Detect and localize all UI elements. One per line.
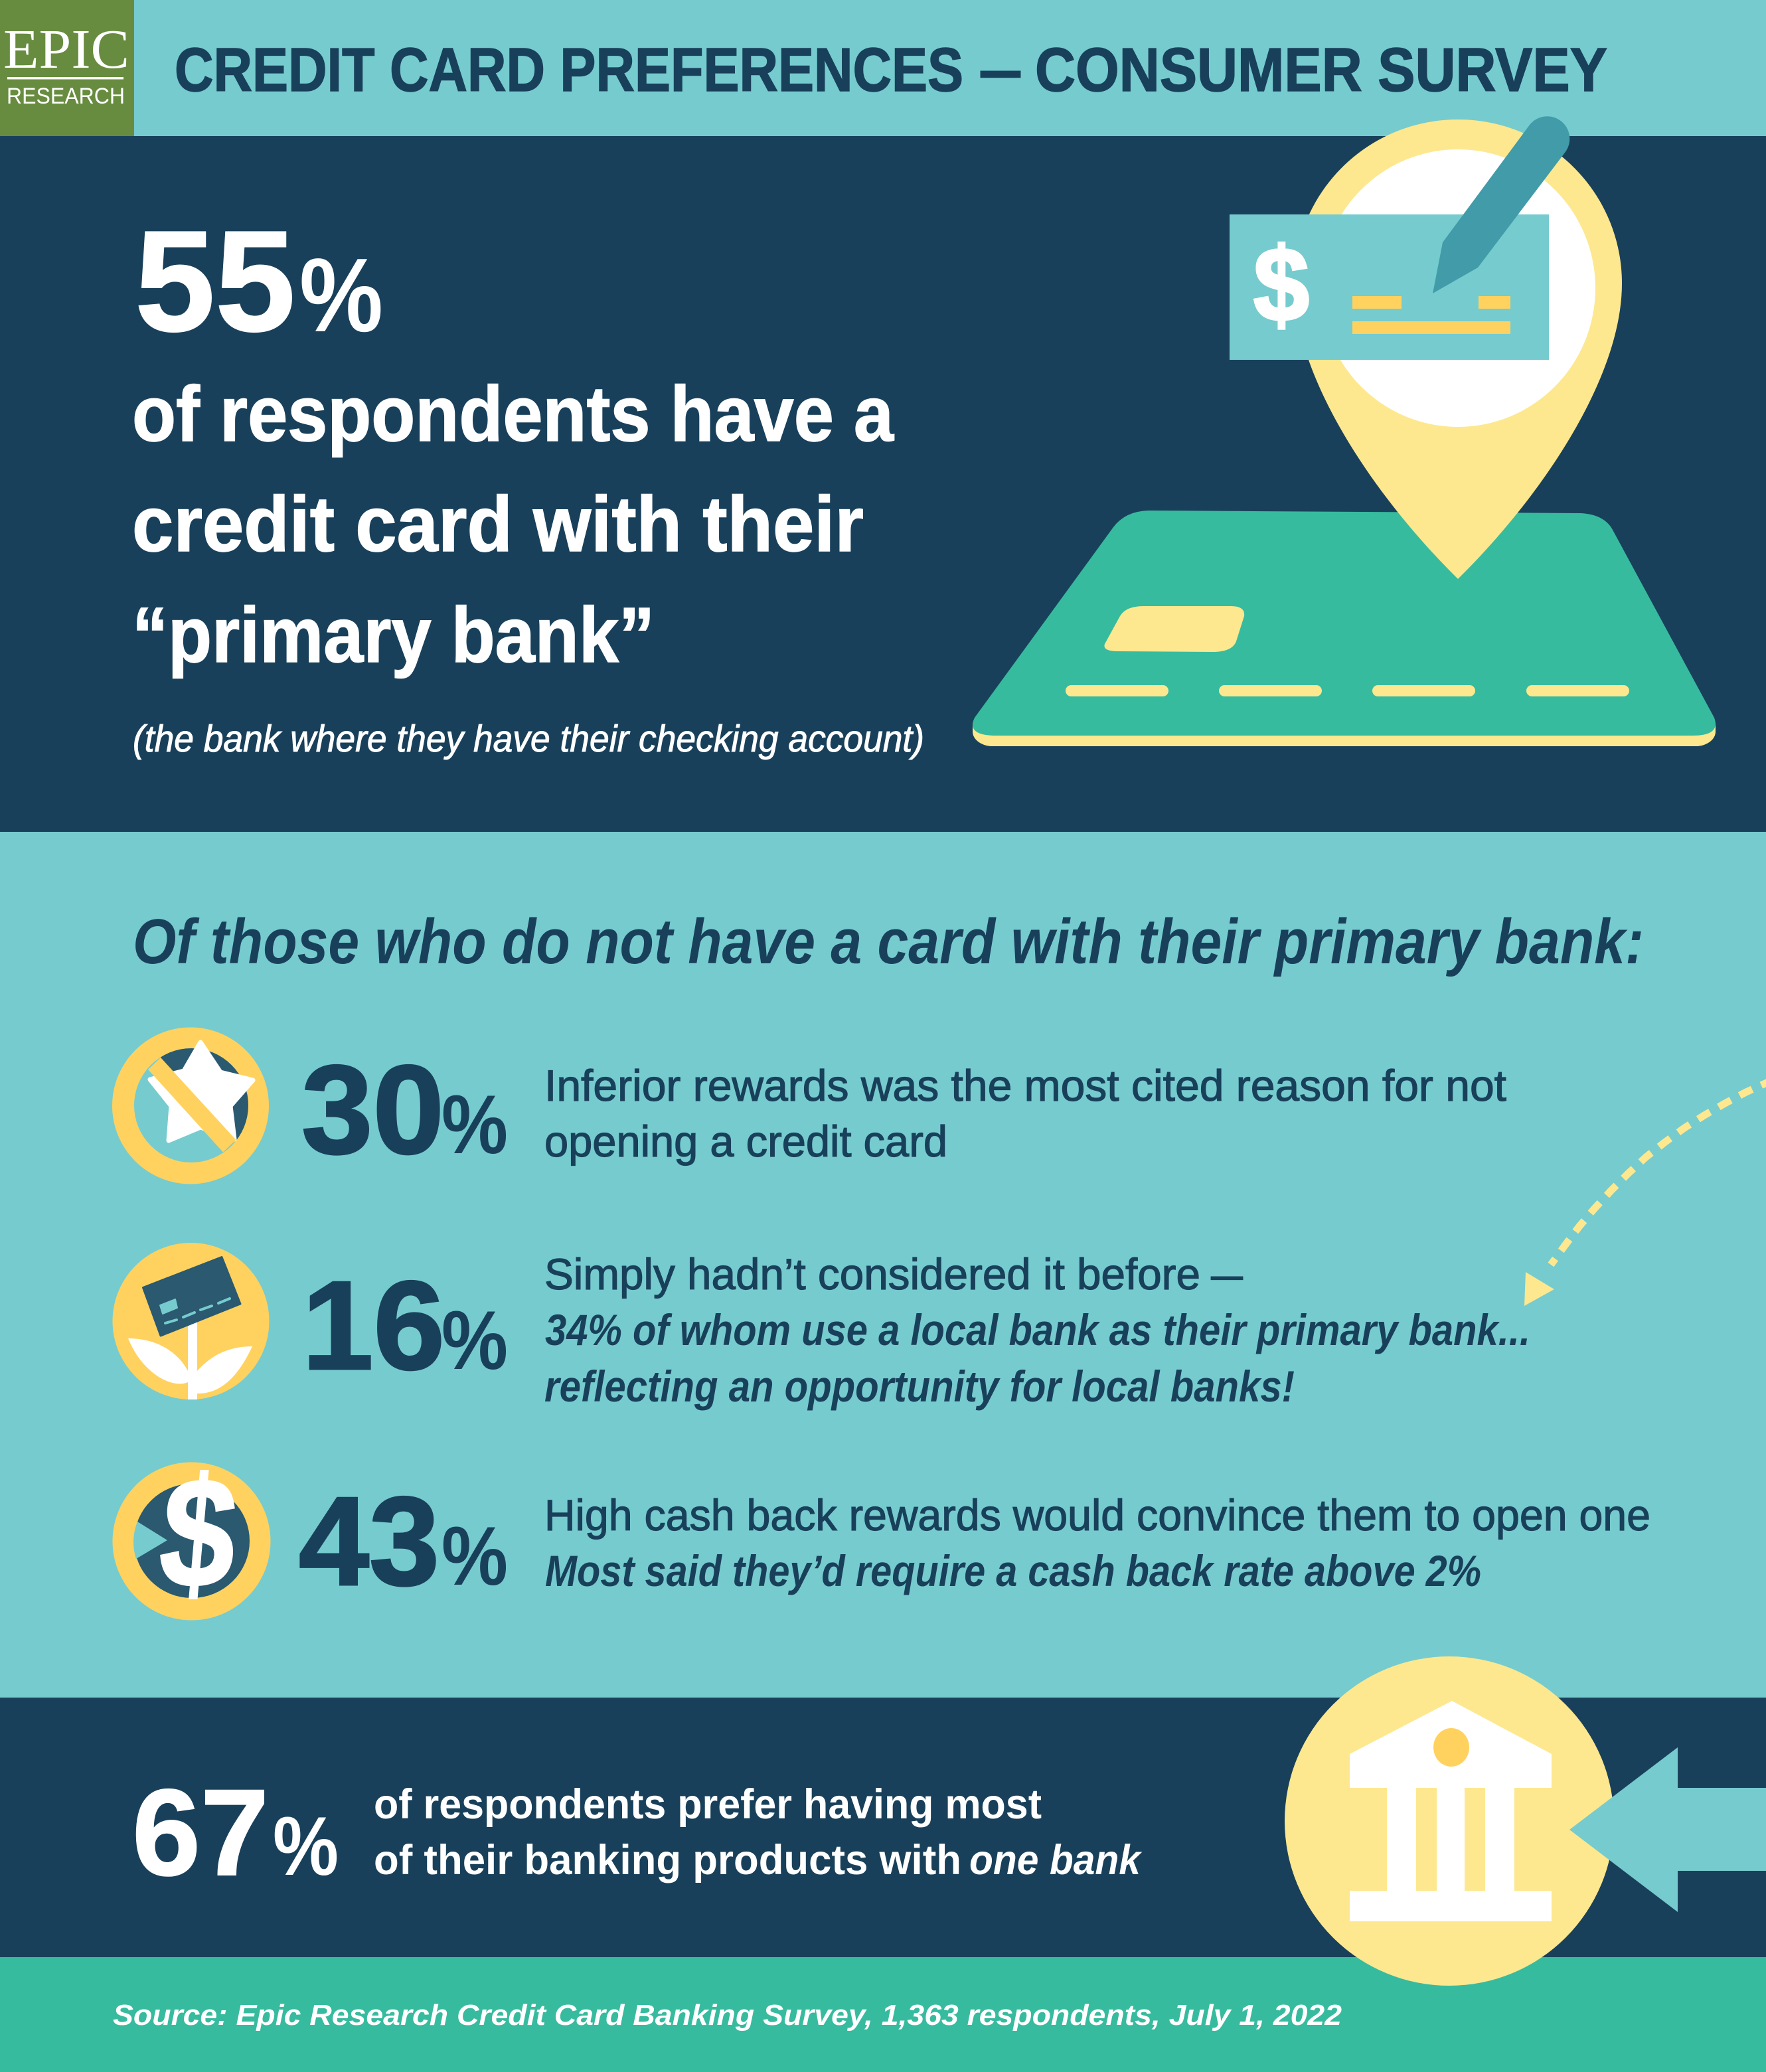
logo: Epic Research: EPIC — [3, 19, 129, 80]
stat: 16%: % — [442, 1295, 508, 1387]
hero text block: credit card with their — [132, 481, 864, 568]
card number dashes — [1066, 685, 1629, 696]
reason text: inferior rewards: opening a credit card — [544, 1117, 947, 1166]
text: prefer one bank: of their banking products with — [374, 1837, 961, 1883]
stat: 30% — [301, 1040, 508, 1180]
card chip — [1104, 606, 1244, 652]
title: CONSUMER SURVEY — [1035, 35, 1607, 104]
reason text: hadn't considered: reflecting an opportunity for local banks! — [544, 1362, 1295, 1411]
stat: 43%: % — [442, 1510, 508, 1603]
panel: hero dark band — [0, 136, 1766, 832]
reason text: cash back: Most said they’d require a cash back rate above 2% — [545, 1546, 1481, 1595]
hero text block: 55 — [135, 200, 295, 361]
pen — [1433, 116, 1569, 293]
reason text: inferior rewards: Inferior rewards was the most cited reason for not — [544, 1061, 1506, 1110]
reason text: cash back: High cash back rewards would convince them to open one — [544, 1490, 1650, 1540]
reason text: inferior rewards — [544, 1061, 1506, 1166]
stat: 16%: 16 — [302, 1255, 445, 1396]
hero text block: of respondents have a — [132, 370, 894, 458]
stat: 30%: 30 — [301, 1040, 444, 1180]
arrow: dashed curve pointing to local banks — [1524, 1079, 1766, 1306]
title: CREDIT CARD PREFERENCES — [175, 35, 963, 104]
hero text block — [132, 200, 924, 760]
text: prefer one bank: one bank — [969, 1837, 1143, 1883]
stat: 43%: 43 — [299, 1471, 440, 1612]
icon: bank building — [1285, 1656, 1614, 1986]
card edge — [973, 710, 1716, 746]
source line: Source: Epic Research Credit Card Banking Survey, 1,363 respondents, July 1, 2022 — [113, 1999, 1342, 2032]
location pin — [1294, 120, 1622, 579]
icon: dollar coin — [113, 1445, 271, 1620]
icon: star crossed out — [112, 1028, 269, 1184]
cheque dollar sign: $ — [1253, 226, 1309, 343]
logo: Epic Research: RESEARCH — [7, 84, 125, 109]
hero text block: “primary bank” — [132, 592, 655, 679]
cheque lines — [1352, 296, 1510, 334]
stat: 67%: 67 — [132, 1765, 269, 1901]
hero text block: % — [299, 237, 383, 354]
reason text: hadn't considered: Simply hadn’t considered it before — [544, 1249, 1200, 1299]
illustration: credit card with location pin and cheque — [973, 116, 1716, 746]
panel: bottom dark band — [0, 1698, 1766, 1958]
reason text: hadn't considered — [544, 1249, 1530, 1411]
pin centre — [1321, 149, 1595, 427]
icon: credit card plant — [113, 1243, 270, 1399]
text: prefer one bank — [374, 1781, 1143, 1883]
reason text: hadn't considered: — — [1211, 1249, 1243, 1299]
icon: dollar coin: $ — [153, 1445, 244, 1620]
logo: Epic Research — [0, 0, 134, 136]
panel: source footer band — [0, 1957, 1766, 2072]
stat: 67%: % — [273, 1800, 339, 1893]
hero text block: (the bank where they have their checking account) — [133, 718, 924, 760]
title — [175, 35, 1607, 104]
title: — — [981, 35, 1020, 104]
reason text: cash back — [544, 1490, 1650, 1595]
stat: 16% — [302, 1255, 508, 1396]
card body — [973, 511, 1716, 736]
stat: 43% — [299, 1471, 508, 1612]
stat: 30%: % — [442, 1079, 508, 1171]
stat: 67% — [132, 1765, 339, 1901]
cheque — [1230, 214, 1549, 360]
reason text: hadn't considered: 34% of whom use a local bank as their primary bank... — [545, 1305, 1530, 1354]
arrow: pointing to bank — [1569, 1747, 1766, 1912]
text: prefer one bank: of respondents prefer having most — [374, 1781, 1042, 1828]
